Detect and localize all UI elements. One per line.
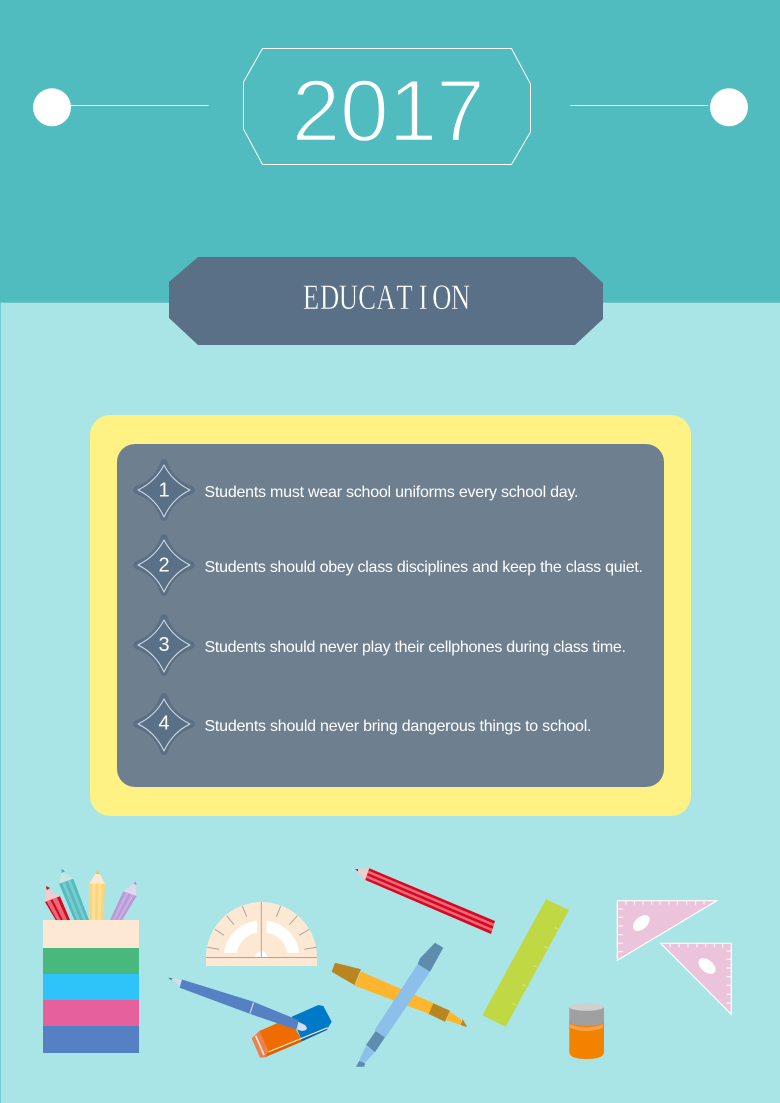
teal pencil [59, 869, 89, 920]
rule 3: 3 [158, 634, 170, 656]
icon: glue bottle [569, 1003, 604, 1059]
rule 2: Students should obey class disciplines and keep the class quiet. [204, 559, 643, 576]
icon: eraser [252, 1005, 332, 1058]
icon: set square 2 [661, 943, 731, 1014]
icon: red pencil [355, 868, 495, 934]
title banner: EDUCATION [303, 277, 470, 317]
red pencil [45, 886, 70, 920]
rule 1: Students must wear school uniforms every school day. [204, 484, 578, 501]
rule 4 [133, 693, 592, 755]
rule 1 [133, 459, 578, 521]
year badge: 2017 [292, 61, 485, 160]
purple pencil [110, 881, 137, 920]
left connector: dot and line [33, 88, 208, 126]
panel: rules frame [90, 415, 691, 816]
icon: blue pen [168, 978, 307, 1031]
rule 2 [133, 534, 643, 596]
lower background [0, 302, 780, 1103]
right connector: line and dot [570, 88, 748, 126]
header band [0, 0, 780, 302]
cup stripes [43, 920, 139, 1053]
year badge [244, 48, 530, 164]
rule 1: 1 [158, 480, 170, 502]
icon: blue marker [356, 943, 443, 1067]
icon: yellow marker [332, 963, 467, 1027]
rule 2: 2 [158, 555, 170, 577]
title banner [169, 257, 603, 345]
rule 4: Students should never bring dangerous things to school. [204, 718, 592, 735]
icon: green ruler [482, 899, 569, 1027]
icon: protractor [206, 902, 317, 966]
rule 3 [133, 614, 626, 676]
rule 3: Students should never play their cellphones during class time. [204, 639, 626, 656]
rule 4: 4 [158, 713, 170, 735]
icon: pencil cup [43, 869, 139, 1053]
icon: set square 1 [617, 901, 717, 960]
yellow pencil [89, 870, 105, 920]
